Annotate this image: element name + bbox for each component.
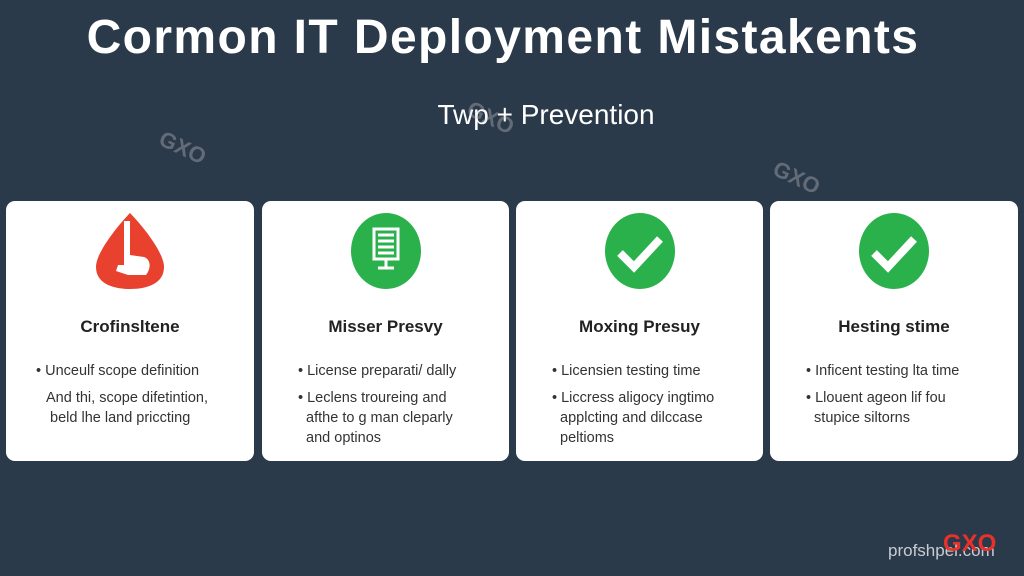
title: Cormon IT Deployment Mistakents xyxy=(87,11,919,64)
bullets 4: stupice siltorns xyxy=(814,410,910,426)
panel: card 2 xyxy=(262,201,509,461)
panel: card 4 xyxy=(770,201,1018,461)
bullets 3: peltioms xyxy=(560,430,614,446)
bullets 2 xyxy=(298,363,456,446)
heading 1: Crofinsltene xyxy=(80,317,180,336)
footer url: profshpel.com xyxy=(888,541,995,560)
bullets 1: beld lhe land priccting xyxy=(50,410,190,426)
heading 3: Moxing Presuy xyxy=(579,317,700,336)
bullets 3 xyxy=(552,363,714,446)
bullets 4: • Inficent testing lta time xyxy=(806,363,959,379)
bullets 1: • Unceulf scope definition xyxy=(36,363,199,379)
watermark 2: GXO xyxy=(769,156,824,199)
heading 4: Hesting stime xyxy=(838,317,950,336)
bullets 3: • Licensien testing time xyxy=(552,363,701,379)
bullets 4: • Llouent ageon lif fou xyxy=(806,390,946,406)
bullets 3: • Liccress aligocy ingtimo xyxy=(552,390,714,406)
bullets 1 xyxy=(36,363,208,426)
heading 2: Misser Presvy xyxy=(328,317,443,336)
bullets 1: And thi, scope difetintion, xyxy=(46,390,208,406)
bullets 4 xyxy=(806,363,959,426)
icon: red warning hand xyxy=(96,213,164,289)
bullets 3: applcting and dilccase xyxy=(560,410,703,426)
icon: green check 2 xyxy=(859,213,929,289)
bullets 2: • Leclens troureing and xyxy=(298,390,447,406)
icon: green document xyxy=(351,213,421,289)
bullets 2: afthe to g man cleparly xyxy=(306,410,453,426)
footer logo: GXO xyxy=(943,530,996,557)
bullets 2: and optinos xyxy=(306,430,381,446)
panel: card 1 xyxy=(6,201,254,461)
subtitle: Twp + Prevention xyxy=(437,99,655,130)
icon: green check xyxy=(605,213,675,289)
panel: card 3 xyxy=(516,201,763,461)
watermark: GXO xyxy=(155,126,210,169)
bullets 2: • License preparati/ dally xyxy=(298,363,456,379)
watermark 3: GXO xyxy=(463,96,518,139)
